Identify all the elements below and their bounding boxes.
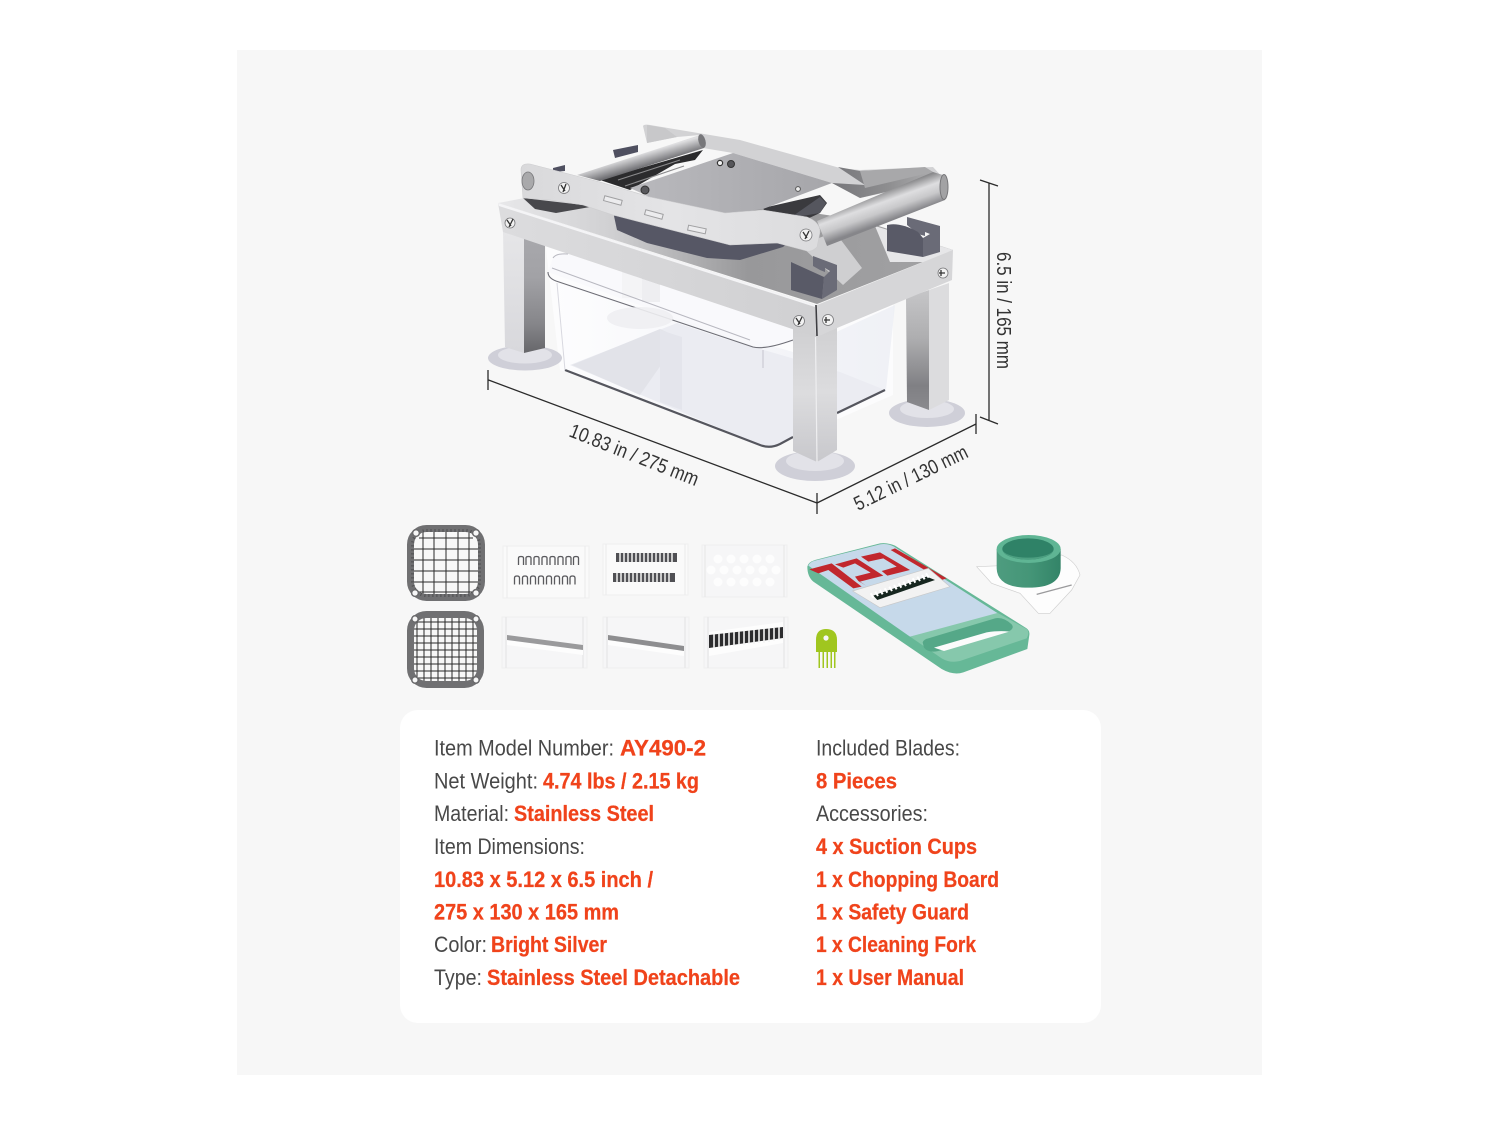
lever pivot [522,172,534,190]
blades set [410,528,788,685]
product illustration: chopper on stand [488,125,965,481]
dark guide blocks [553,145,940,299]
right specification column: Included Blades: [816,736,960,760]
handle bar [817,172,948,246]
red guide marks [809,548,947,588]
blade: large square grid [410,528,482,598]
board handle surface [910,612,1028,662]
right rear suction cup [889,399,965,427]
chopping board [807,543,1029,673]
screws [505,182,948,326]
front centre leg [793,322,837,462]
left specification column: Type: [434,965,482,990]
left specification column: AY490-2 [620,736,706,760]
blade: serrated slicer [704,617,788,668]
left front leg [503,230,545,353]
handle cutout [923,618,1013,652]
right specification column: 8 Pieces [816,768,897,794]
left specification column [434,736,740,990]
screw slots [507,184,945,325]
left specification column: Stainless Steel [514,801,654,826]
left specification column: Bright Silver [491,932,607,957]
left specification column: Item Dimensions: [434,834,585,859]
blade: small square grid [410,614,480,685]
right specification column: 4 x Suction Cups [816,834,977,859]
clear container [548,254,895,447]
pusher top plate [630,153,832,214]
specifications card [400,710,1101,1023]
left specification column: Material: [434,801,509,826]
bracket under lever pivot [523,198,590,213]
rear suction cup [607,307,673,329]
background panel [237,50,1262,1075]
front centre suction cup [775,451,855,481]
handle opening [934,631,1009,651]
right specification column: Accessories: [816,801,928,826]
stand front beams [498,203,953,337]
left specification column: Stainless Steel Detachable [487,965,740,990]
board body [807,543,1029,673]
dimension: width [817,414,976,515]
stand top plate [498,197,953,304]
right rear leg [906,283,949,410]
dark pusher block [614,195,827,260]
left front suction cup [488,346,562,370]
dimension: length: 10.83 in / 275 mm [566,420,702,491]
left specification column: Color: [434,932,487,957]
blade: thin slicer [603,617,689,668]
rear crossbar [577,133,707,181]
left specification column: 275 x 130 x 165 mm [434,900,619,924]
safety guard [977,535,1080,613]
rear leg [622,268,660,302]
right specification column: 1 x Chopping Board [816,867,999,892]
white backdrop glow behind stand [545,240,893,440]
cleaning fork [816,629,837,668]
blade: wide julienne [503,546,589,598]
black spring rail [600,150,703,190]
left specification column: Net Weight: [434,768,538,794]
dimension: height: 6.5 in / 165 mm [992,252,1014,369]
slicer insert [853,568,950,608]
right specification column [816,736,999,990]
left specification column: 10.83 x 5.12 x 6.5 inch / [434,867,653,892]
right specification column: 1 x Safety Guard [816,900,969,924]
dimension: width: 5.12 in / 130 mm [851,441,972,515]
arm slots [604,196,706,234]
blade: thick slicer [502,617,587,668]
blade: fine julienne [603,544,688,595]
dimension: height [980,180,1014,424]
blade: perforated [702,545,787,597]
left specification column: 4.74 lbs / 2.15 kg [543,768,699,794]
rear arm of lever [643,125,945,198]
dimension: length [488,370,817,514]
left specification column: Item Model Number: [434,736,614,760]
right specification column: 1 x Cleaning Fork [816,932,977,957]
right specification column: 1 x User Manual [816,965,964,990]
green cylinder [997,535,1061,588]
cutting surface [808,544,997,637]
front lever arm [521,164,820,251]
